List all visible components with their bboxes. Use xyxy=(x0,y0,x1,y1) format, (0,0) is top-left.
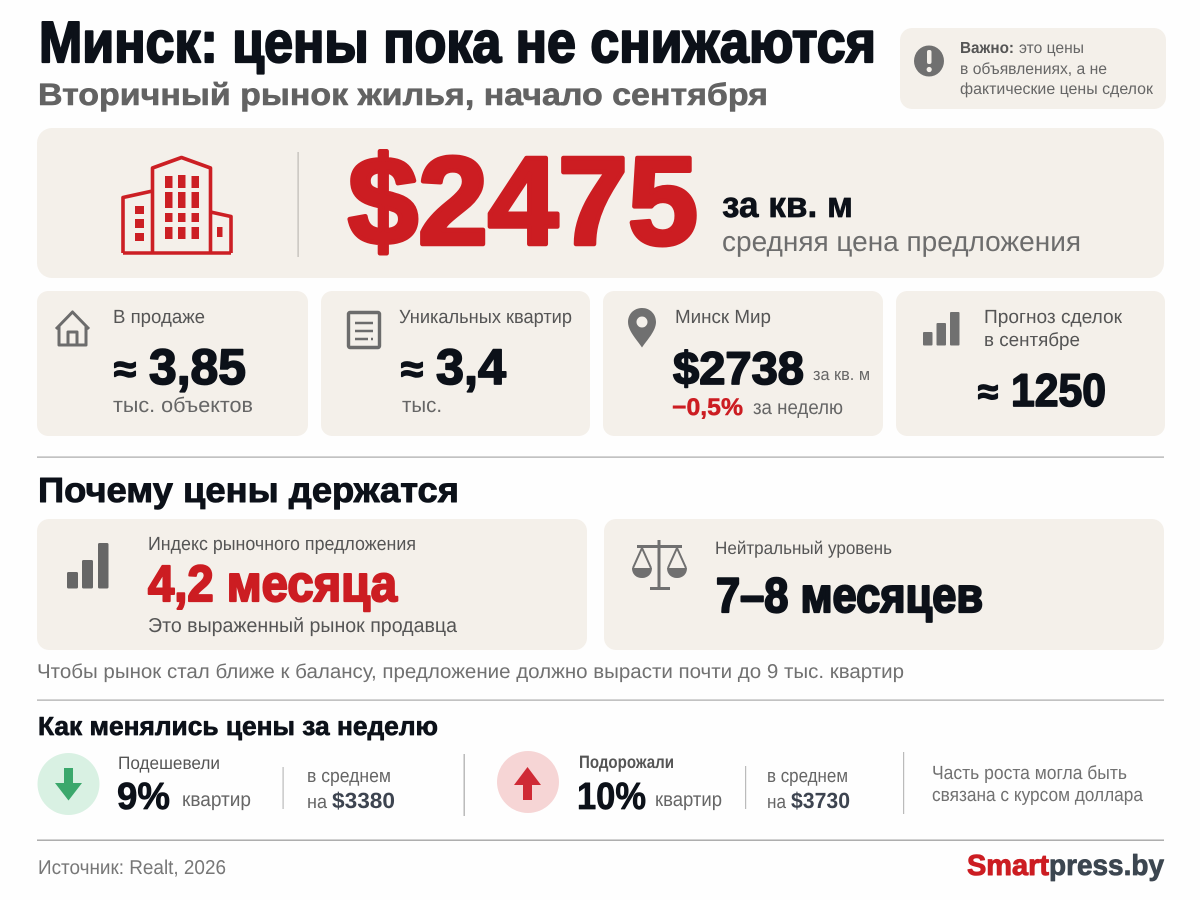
panel: supply index: Индекс рыночного предложения xyxy=(148,534,416,555)
big price: $2475 xyxy=(348,132,698,271)
panel: Minsk Mir xyxy=(603,291,883,436)
average price: $3730 xyxy=(791,788,850,813)
icon: bars xyxy=(923,312,960,346)
panel: for sale: тыс. объектов xyxy=(113,394,253,417)
logo: press.by xyxy=(1049,850,1164,882)
value xyxy=(117,776,251,818)
icon: document xyxy=(348,312,380,348)
heading: weekly changes: Как менялись цены за неделю xyxy=(38,711,438,741)
value xyxy=(577,776,722,818)
dollar note: Часть роста могла быть xyxy=(932,763,1127,784)
panel: neutral level: Нейтральный уровень xyxy=(715,538,892,558)
icon: exclamation mark xyxy=(914,46,944,76)
weekly change xyxy=(672,394,843,421)
group: more expensive: Подорожали xyxy=(579,752,674,772)
average price xyxy=(307,766,395,813)
weekly change: −0,5% xyxy=(672,394,743,421)
panel: for sale: В продаже xyxy=(113,307,205,328)
value xyxy=(401,339,506,395)
value: 7–8 месяцев xyxy=(716,569,983,623)
price caption: средняя цена предложения xyxy=(722,226,1081,257)
note text: Важно: xyxy=(960,40,1014,57)
icon: bars xyxy=(67,543,108,588)
average price: на xyxy=(767,792,786,813)
value: ≈ xyxy=(114,349,136,391)
icon: map pin xyxy=(628,308,656,348)
icon: building xyxy=(123,158,231,253)
value: 3,85 xyxy=(149,339,246,395)
value: квартир xyxy=(655,789,722,811)
price unit: за кв. м xyxy=(722,184,853,225)
logo: Smart xyxy=(967,850,1049,882)
dollar note xyxy=(932,763,1143,806)
icon: house xyxy=(56,312,89,345)
value: 3,4 xyxy=(436,339,506,395)
value: 9% xyxy=(117,776,170,818)
heading: why prices hold: Почему цены держатся xyxy=(38,471,459,510)
icon: red up arrow xyxy=(497,751,559,813)
value: 10% xyxy=(577,776,646,818)
value: ≈ xyxy=(978,371,998,412)
note text xyxy=(960,40,1154,98)
weekly change: за неделю xyxy=(753,397,843,419)
average price xyxy=(767,766,850,813)
label xyxy=(984,307,1123,351)
label: в сентябре xyxy=(984,330,1080,351)
value: ≈ xyxy=(401,349,423,391)
note text: фактические цены сделок xyxy=(960,81,1154,98)
callout: important note xyxy=(900,28,1166,109)
panel: deals forecast xyxy=(896,291,1165,436)
panel: for sale xyxy=(37,291,308,436)
logo xyxy=(967,850,1164,882)
dollar note: связана с курсом доллара xyxy=(932,785,1143,806)
value: $2738 xyxy=(673,342,804,394)
group: cheaper xyxy=(38,753,395,818)
value: 1250 xyxy=(1011,364,1106,416)
subtitle: Вторичный рынок жилья, начало сентября xyxy=(38,77,768,112)
panel: Minsk Mir: за кв. м xyxy=(813,365,870,384)
panel: main price xyxy=(37,128,1164,278)
panel: supply index xyxy=(37,519,587,650)
source: Источник: Realt, 2026 xyxy=(38,857,226,879)
note text: в объявлениях, а не xyxy=(960,61,1107,78)
average price: в среднем xyxy=(307,766,391,787)
panel: supply index: Это выраженный рынок продавца xyxy=(148,615,458,637)
average price: в среднем xyxy=(767,766,848,787)
panel: unique flats: тыс. xyxy=(402,394,442,417)
group: more expensive xyxy=(497,751,850,818)
note text: это цены xyxy=(1019,40,1084,57)
value: квартир xyxy=(182,789,251,811)
panel: Minsk Mir: Минск Мир xyxy=(675,307,771,328)
value: 4,2 месяца xyxy=(148,555,398,612)
icon: green down arrow xyxy=(38,753,100,815)
panel: neutral level xyxy=(604,519,1164,650)
panel: unique flats xyxy=(321,291,590,436)
average price: $3380 xyxy=(332,788,395,813)
balance note: Чтобы рынок стал ближе к балансу, предложение должно вырасти почти до 9 тыс. квартир xyxy=(37,661,904,683)
group: cheaper: Подешевели xyxy=(118,753,220,773)
average price: на xyxy=(307,792,327,813)
title: Минск: цены пока не снижаются xyxy=(39,10,876,75)
icon: scales xyxy=(632,540,687,588)
label: Прогноз сделок xyxy=(984,307,1123,328)
panel: unique flats: Уникальных квартир xyxy=(399,307,572,328)
